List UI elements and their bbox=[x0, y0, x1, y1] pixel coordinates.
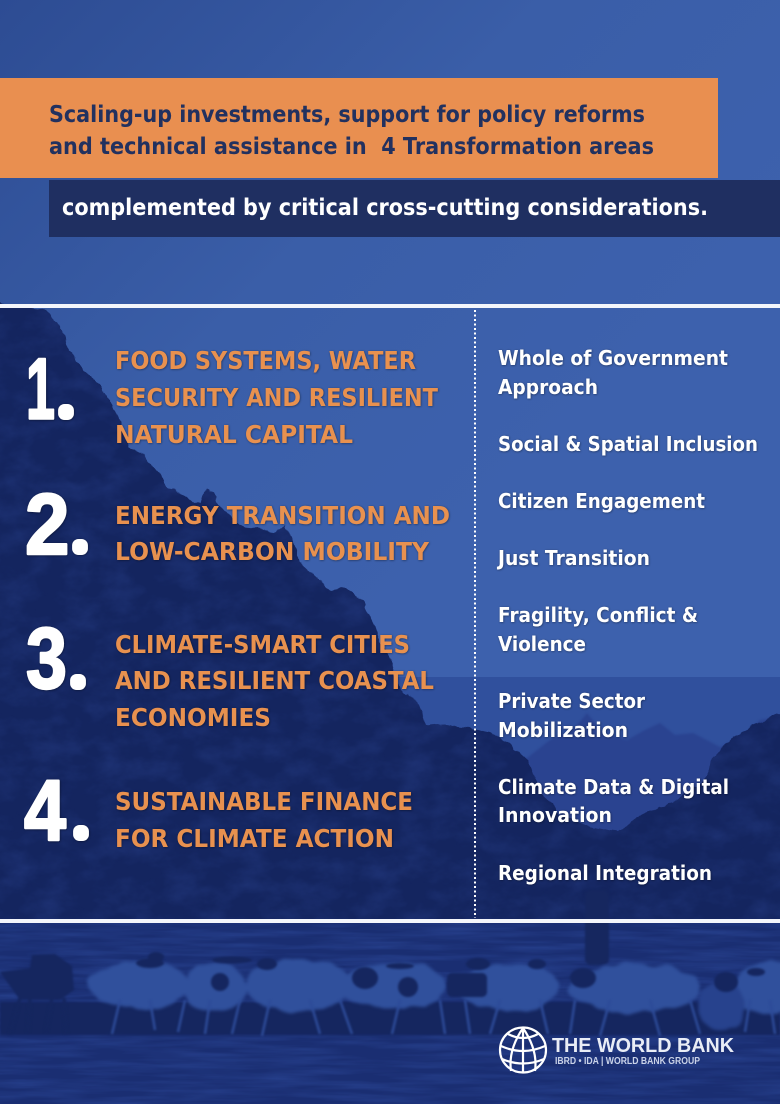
panel: cross-cutting considerations: Whole of Government bbox=[498, 346, 728, 370]
area 3: AND RESILIENT COASTAL bbox=[115, 666, 434, 695]
header: orange banner bbox=[0, 78, 718, 178]
panel: cross-cutting considerations: Fragility, Conflict & bbox=[498, 603, 698, 627]
World Bank logo: IBRD • IDA | WORLD BANK GROUP bbox=[555, 1056, 700, 1067]
area 4: . bbox=[78, 817, 84, 839]
area 2: . bbox=[77, 531, 83, 553]
panel: cross-cutting considerations: Innovation bbox=[498, 803, 612, 827]
area 2: LOW-CARBON MOBILITY bbox=[115, 537, 430, 566]
header: orange banner: and technical assistance in 4 Transformation areas bbox=[49, 134, 654, 160]
area 1 bbox=[26, 342, 438, 449]
area 2 bbox=[25, 477, 450, 573]
top divider bbox=[0, 304, 780, 308]
area 3: 3 bbox=[26, 611, 67, 707]
panel: cross-cutting considerations: Mobilization bbox=[498, 718, 628, 742]
area 2: ENERGY TRANSITION AND bbox=[115, 501, 450, 530]
header: orange banner: Scaling-up investments, support for policy reforms bbox=[49, 102, 645, 128]
panel: transformation areas bbox=[24, 342, 450, 859]
area 1: NATURAL CAPITAL bbox=[115, 420, 353, 449]
panel: cross-cutting considerations: Violence bbox=[498, 632, 586, 656]
area 4 bbox=[24, 763, 413, 859]
panel: cross-cutting considerations: Approach bbox=[498, 375, 598, 399]
panel: cross-cutting considerations bbox=[496, 346, 758, 885]
area 3: ECONOMIES bbox=[115, 703, 271, 732]
area 1: . bbox=[63, 396, 69, 418]
area 3: CLIMATE-SMART CITIES bbox=[115, 630, 410, 659]
panel: cross-cutting considerations: Citizen Engagement bbox=[498, 489, 705, 513]
background photo: herd of sheep on the ground bbox=[0, 890, 780, 1104]
area 1: 1 bbox=[26, 342, 55, 438]
panel: cross-cutting considerations: Climate Data & Digital bbox=[498, 775, 729, 799]
area 4: FOR CLIMATE ACTION bbox=[115, 824, 394, 853]
header: navy banner: complemented by critical cross-cutting considerations. bbox=[62, 195, 708, 221]
panel: cross-cutting considerations: Regional Integration bbox=[498, 861, 712, 885]
icon: globe bbox=[500, 1028, 546, 1072]
header: navy banner bbox=[49, 180, 780, 237]
area 3 bbox=[26, 611, 434, 732]
area 1: FOOD SYSTEMS, WATER bbox=[115, 346, 416, 375]
World Bank logo bbox=[500, 1028, 734, 1072]
area 1: SECURITY AND RESILIENT bbox=[115, 383, 438, 412]
area 4: SUSTAINABLE FINANCE bbox=[115, 787, 413, 816]
area 2: 2 bbox=[25, 477, 70, 573]
panel: cross-cutting considerations: Private Sector bbox=[498, 689, 646, 713]
area 4: 4 bbox=[24, 763, 66, 859]
area 3: . bbox=[75, 666, 81, 688]
column divider bbox=[474, 310, 476, 918]
World Bank logo: THE WORLD BANK bbox=[552, 1034, 734, 1057]
bottom divider bbox=[0, 919, 780, 923]
panel: cross-cutting considerations: Just Transition bbox=[496, 546, 650, 570]
